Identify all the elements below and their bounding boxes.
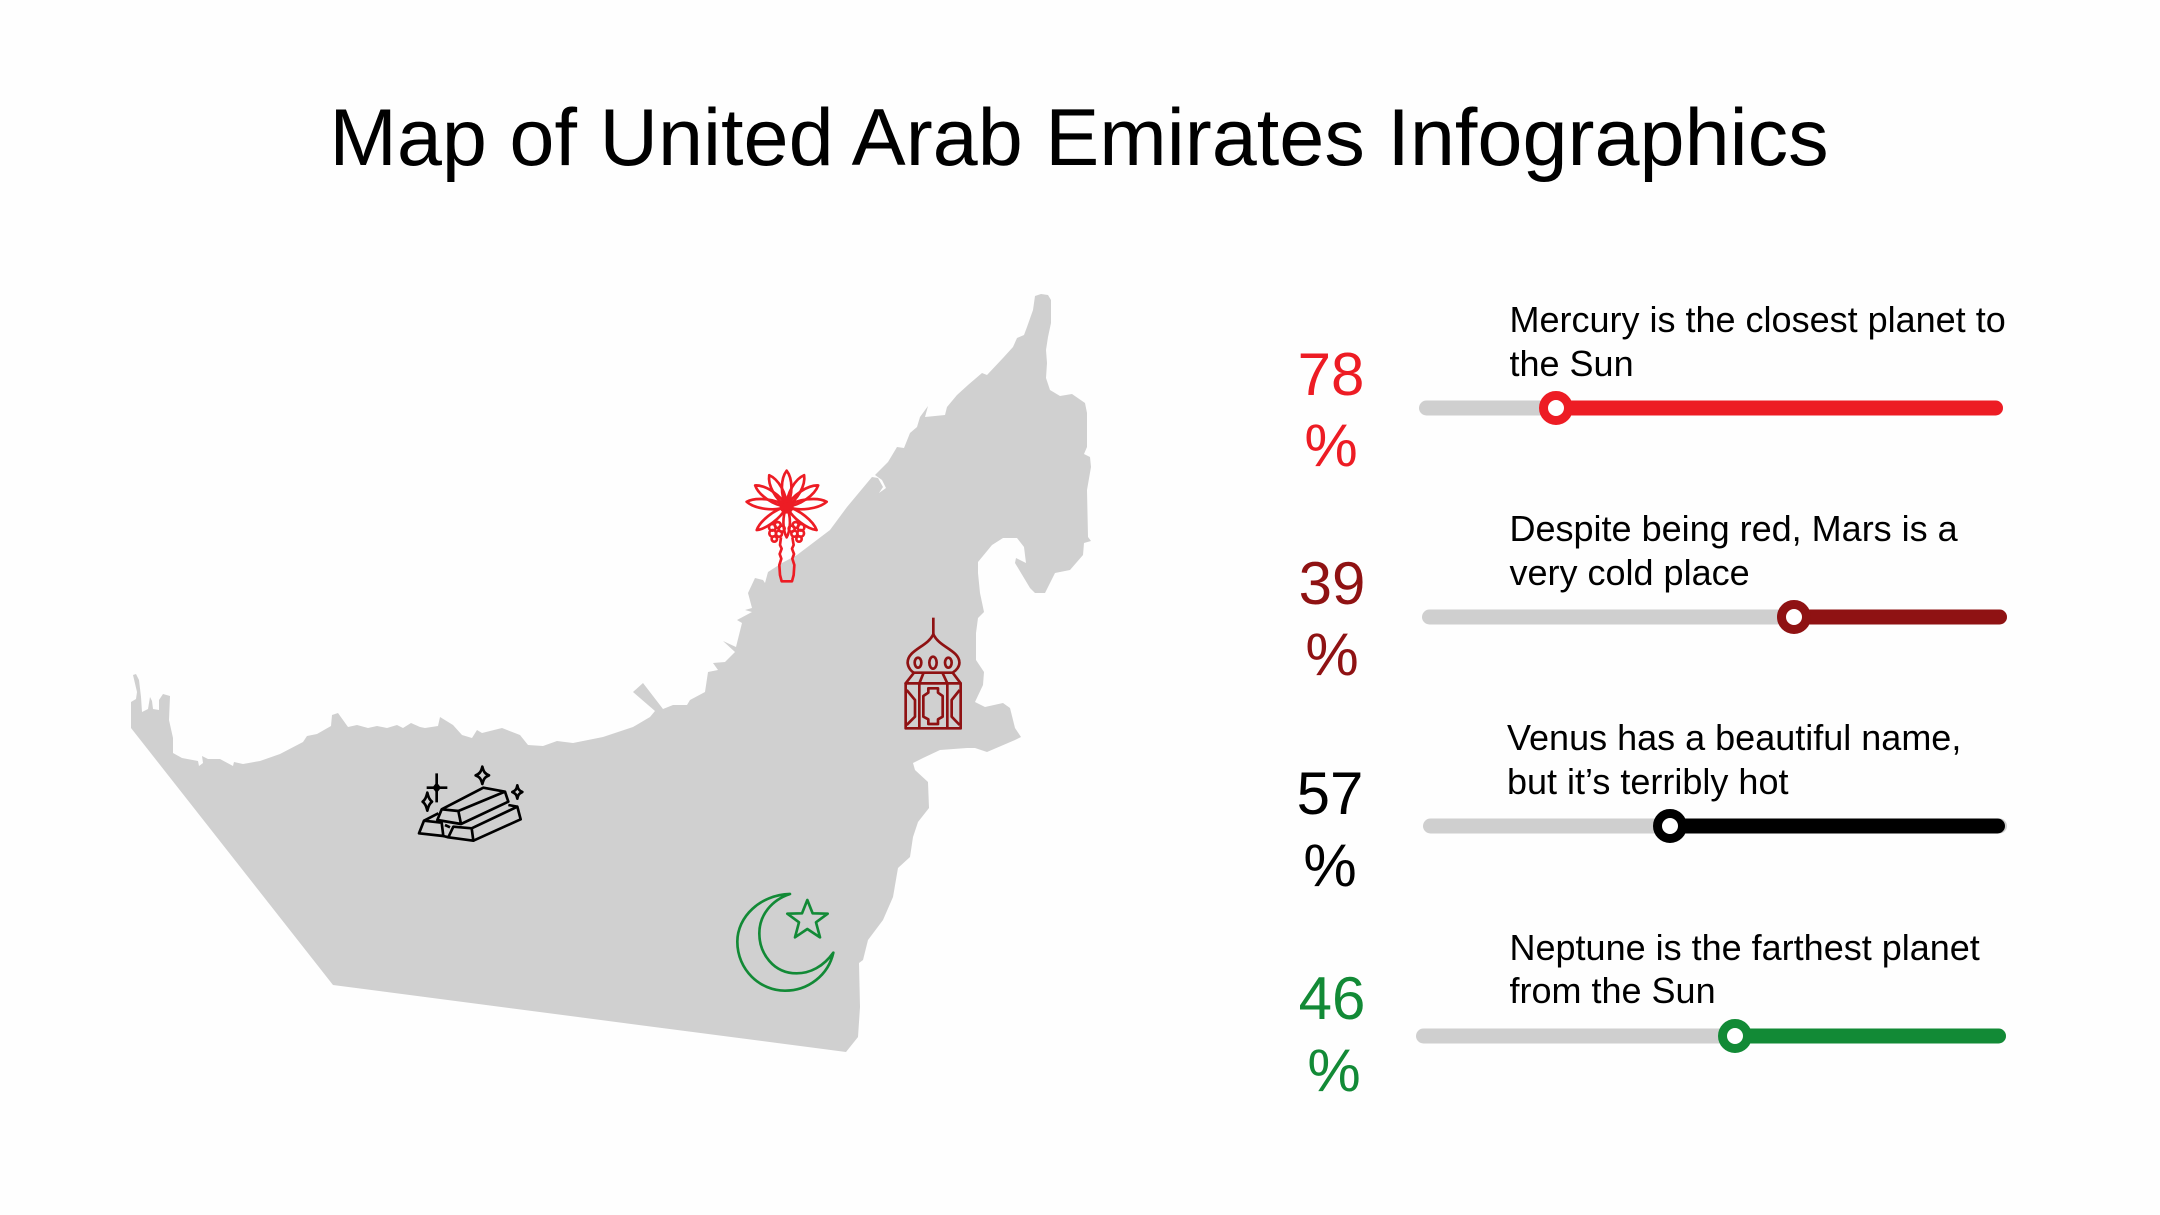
panel: map [131, 294, 1091, 1052]
icon: lantern [906, 618, 961, 728]
description: but it’s terribly hot [1507, 761, 1788, 802]
description: Venus has a beautiful name, [1507, 717, 1961, 758]
map: United Arab Emirates silhouette [131, 294, 1091, 1052]
percentage 46: 46 [1299, 965, 1365, 1032]
title: Map of United Arab Emirates Infographics [329, 93, 1829, 183]
description: Mercury is the closest planet to [1510, 299, 2006, 340]
slider [1423, 814, 2007, 838]
panel: row 4 Neptune [1299, 927, 2006, 1104]
panel: row 3 Venus [1297, 717, 2007, 899]
slider [1419, 396, 2003, 420]
percentage 78: % [1304, 412, 1358, 479]
icon: crescent and star [737, 894, 833, 991]
description: Despite being red, Mars is a [1510, 508, 1959, 549]
description: the Sun [1510, 343, 1634, 384]
description: Neptune is the farthest planet [1510, 927, 1980, 968]
description: from the Sun [1510, 970, 1716, 1011]
description: very cold place [1510, 552, 1750, 593]
percentage 46: % [1307, 1037, 1361, 1104]
percentage 57: 57 [1297, 760, 1363, 827]
panel: row 1 Mercury [1298, 299, 2006, 479]
percentage 57: % [1303, 832, 1357, 899]
percentage 39: 39 [1299, 550, 1365, 617]
panel: row 2 Mars [1299, 508, 2007, 688]
percentage 78: 78 [1298, 341, 1364, 408]
icon: date palm [746, 471, 827, 581]
slider [1416, 1024, 2006, 1048]
percentage 39: % [1305, 621, 1359, 688]
slider [1422, 604, 2007, 630]
icon: gold bars [419, 767, 522, 841]
